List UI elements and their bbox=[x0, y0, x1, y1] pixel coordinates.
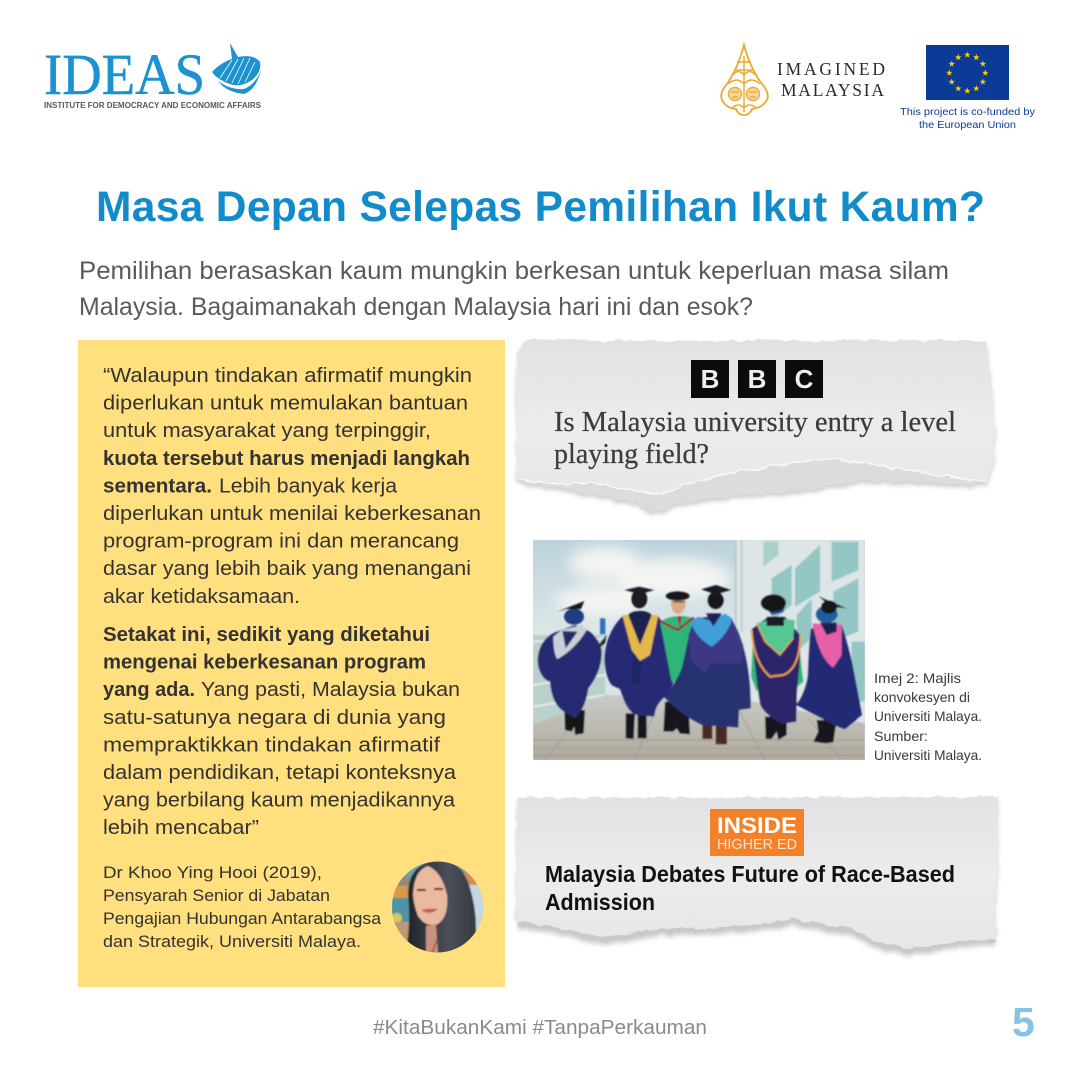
attribution: dan Strategik, Universiti Malaya. bbox=[103, 933, 361, 951]
graduate 2 bbox=[626, 713, 647, 739]
BBC headline bbox=[554, 406, 956, 470]
quote text: akar ketidaksamaan. bbox=[103, 585, 300, 608]
wordmark: IMAGINED bbox=[777, 59, 885, 79]
graduate 5 bbox=[765, 717, 787, 740]
photo caption: konvokesyen di bbox=[874, 689, 970, 705]
building bbox=[736, 540, 865, 722]
logo icon: bird bbox=[212, 43, 261, 94]
photo caption: Universiti Malaya. bbox=[874, 708, 982, 724]
Inside Higher Ed logo bbox=[710, 809, 804, 856]
subtitle bbox=[79, 257, 949, 321]
quote text: satu-satunya negara di dunia yang bbox=[103, 706, 446, 729]
page number: 5 bbox=[1012, 999, 1035, 1045]
quote text bbox=[103, 364, 481, 839]
BBC headline: playing field? bbox=[554, 438, 709, 470]
graduate 6 bbox=[813, 720, 837, 743]
quote text: Setakat ini, sedikit yang diketahui bbox=[103, 623, 430, 646]
BBC logo: C bbox=[795, 364, 814, 394]
quote text: dalam pendidikan, tetapi konteksnya bbox=[103, 761, 457, 784]
quote text: “Walaupun tindakan afirmatif mungkin bbox=[103, 364, 472, 387]
quote text: kuota tersebut harus menjadi langkah bbox=[103, 447, 470, 470]
Inside Higher Ed headline bbox=[545, 861, 955, 915]
quote text: yang berbilang kaum menjadikannya bbox=[103, 789, 456, 812]
quote text: mengenai keberkesanan program bbox=[103, 651, 426, 674]
BBC logo: B bbox=[748, 364, 766, 394]
logo tagline: INSTITUTE FOR DEMOCRACY AND ECONOMIC AFFAIRS bbox=[44, 101, 262, 110]
logo: EU flag bbox=[900, 45, 1036, 131]
flag bbox=[926, 45, 1009, 100]
BBC logo: B bbox=[701, 364, 719, 394]
railing bbox=[533, 635, 605, 725]
hashtags: #KitaBukanKami #TanpaPerkauman bbox=[373, 1016, 707, 1039]
quote text: lebih mencabar” bbox=[103, 816, 259, 839]
torn paper bbox=[517, 797, 998, 952]
BBC headline: Is Malaysia university entry a level bbox=[554, 406, 956, 438]
quote text: sementara. bbox=[103, 474, 212, 497]
attribution: Pengajian Hubungan Antarabangsa bbox=[103, 910, 382, 928]
panel: Inside Higher Ed torn paper clipping bbox=[517, 797, 998, 952]
photo: graduates at convocation bbox=[533, 540, 865, 760]
photo caption: Imej 2: Majlis bbox=[874, 670, 961, 686]
icon: wayang leaf bbox=[721, 45, 768, 115]
photo caption bbox=[874, 670, 982, 763]
attribution bbox=[103, 864, 382, 951]
quote text: yang ada. bbox=[103, 678, 195, 701]
title: Masa Depan Selepas Pemilihan Ikut Kaum? bbox=[96, 184, 985, 231]
logo wordmark: IDEAS bbox=[44, 42, 205, 107]
photo caption: Sumber: bbox=[874, 728, 928, 744]
quote text: dasar yang lebih baik yang menangani bbox=[103, 557, 471, 580]
subtitle: Pemilihan berasaskan kaum mungkin berkesan untuk keperluan masa silam bbox=[79, 257, 949, 285]
attribution: Dr Khoo Ying Hooi (2019), bbox=[103, 864, 322, 882]
panel: BBC torn paper clipping bbox=[517, 340, 995, 511]
logo: EU flag: the European Union bbox=[919, 119, 1016, 131]
quote text: untuk masyarakat yang terpinggir, bbox=[103, 419, 431, 442]
quote text: diperlukan untuk menilai keberkesanan bbox=[103, 502, 481, 525]
graduate 1 bbox=[564, 710, 585, 735]
Inside Higher Ed headline: Malaysia Debates Future of Race-Based bbox=[545, 861, 955, 887]
quote text: diperlukan untuk memulakan bantuan bbox=[103, 392, 468, 415]
Inside Higher Ed logo: HIGHER ED bbox=[717, 836, 797, 853]
logo: Imagined Malaysia bbox=[721, 45, 885, 115]
panel: quote bbox=[78, 340, 505, 987]
portrait bbox=[392, 861, 485, 953]
quote text: mempraktikkan tindakan afirmatif bbox=[103, 733, 440, 756]
quote text: Yang pasti, Malaysia bukan bbox=[201, 678, 460, 701]
quote text: program-program ini dan merancang bbox=[103, 530, 459, 553]
attribution: Pensyarah Senior di Jabatan bbox=[103, 887, 330, 905]
floor bbox=[533, 695, 865, 760]
logo: Imagined Malaysia: MALAYSIA bbox=[781, 80, 884, 100]
quote text: Lebih banyak kerja bbox=[219, 474, 398, 497]
photo caption: Universiti Malaya. bbox=[874, 747, 982, 763]
Inside Higher Ed headline: Admission bbox=[545, 889, 655, 915]
logo: IDEAS bbox=[44, 42, 262, 110]
Inside Higher Ed logo: INSIDE bbox=[717, 813, 797, 838]
subtitle: Malaysia. Bagaimanakah dengan Malaysia hari ini dan esok? bbox=[79, 293, 753, 321]
torn paper bbox=[517, 340, 995, 511]
graduate 3 bbox=[663, 702, 690, 734]
graduate 4 bbox=[702, 725, 727, 744]
co-funding note: This project is co-funded by bbox=[900, 106, 1036, 118]
BBC logo bbox=[691, 360, 823, 398]
